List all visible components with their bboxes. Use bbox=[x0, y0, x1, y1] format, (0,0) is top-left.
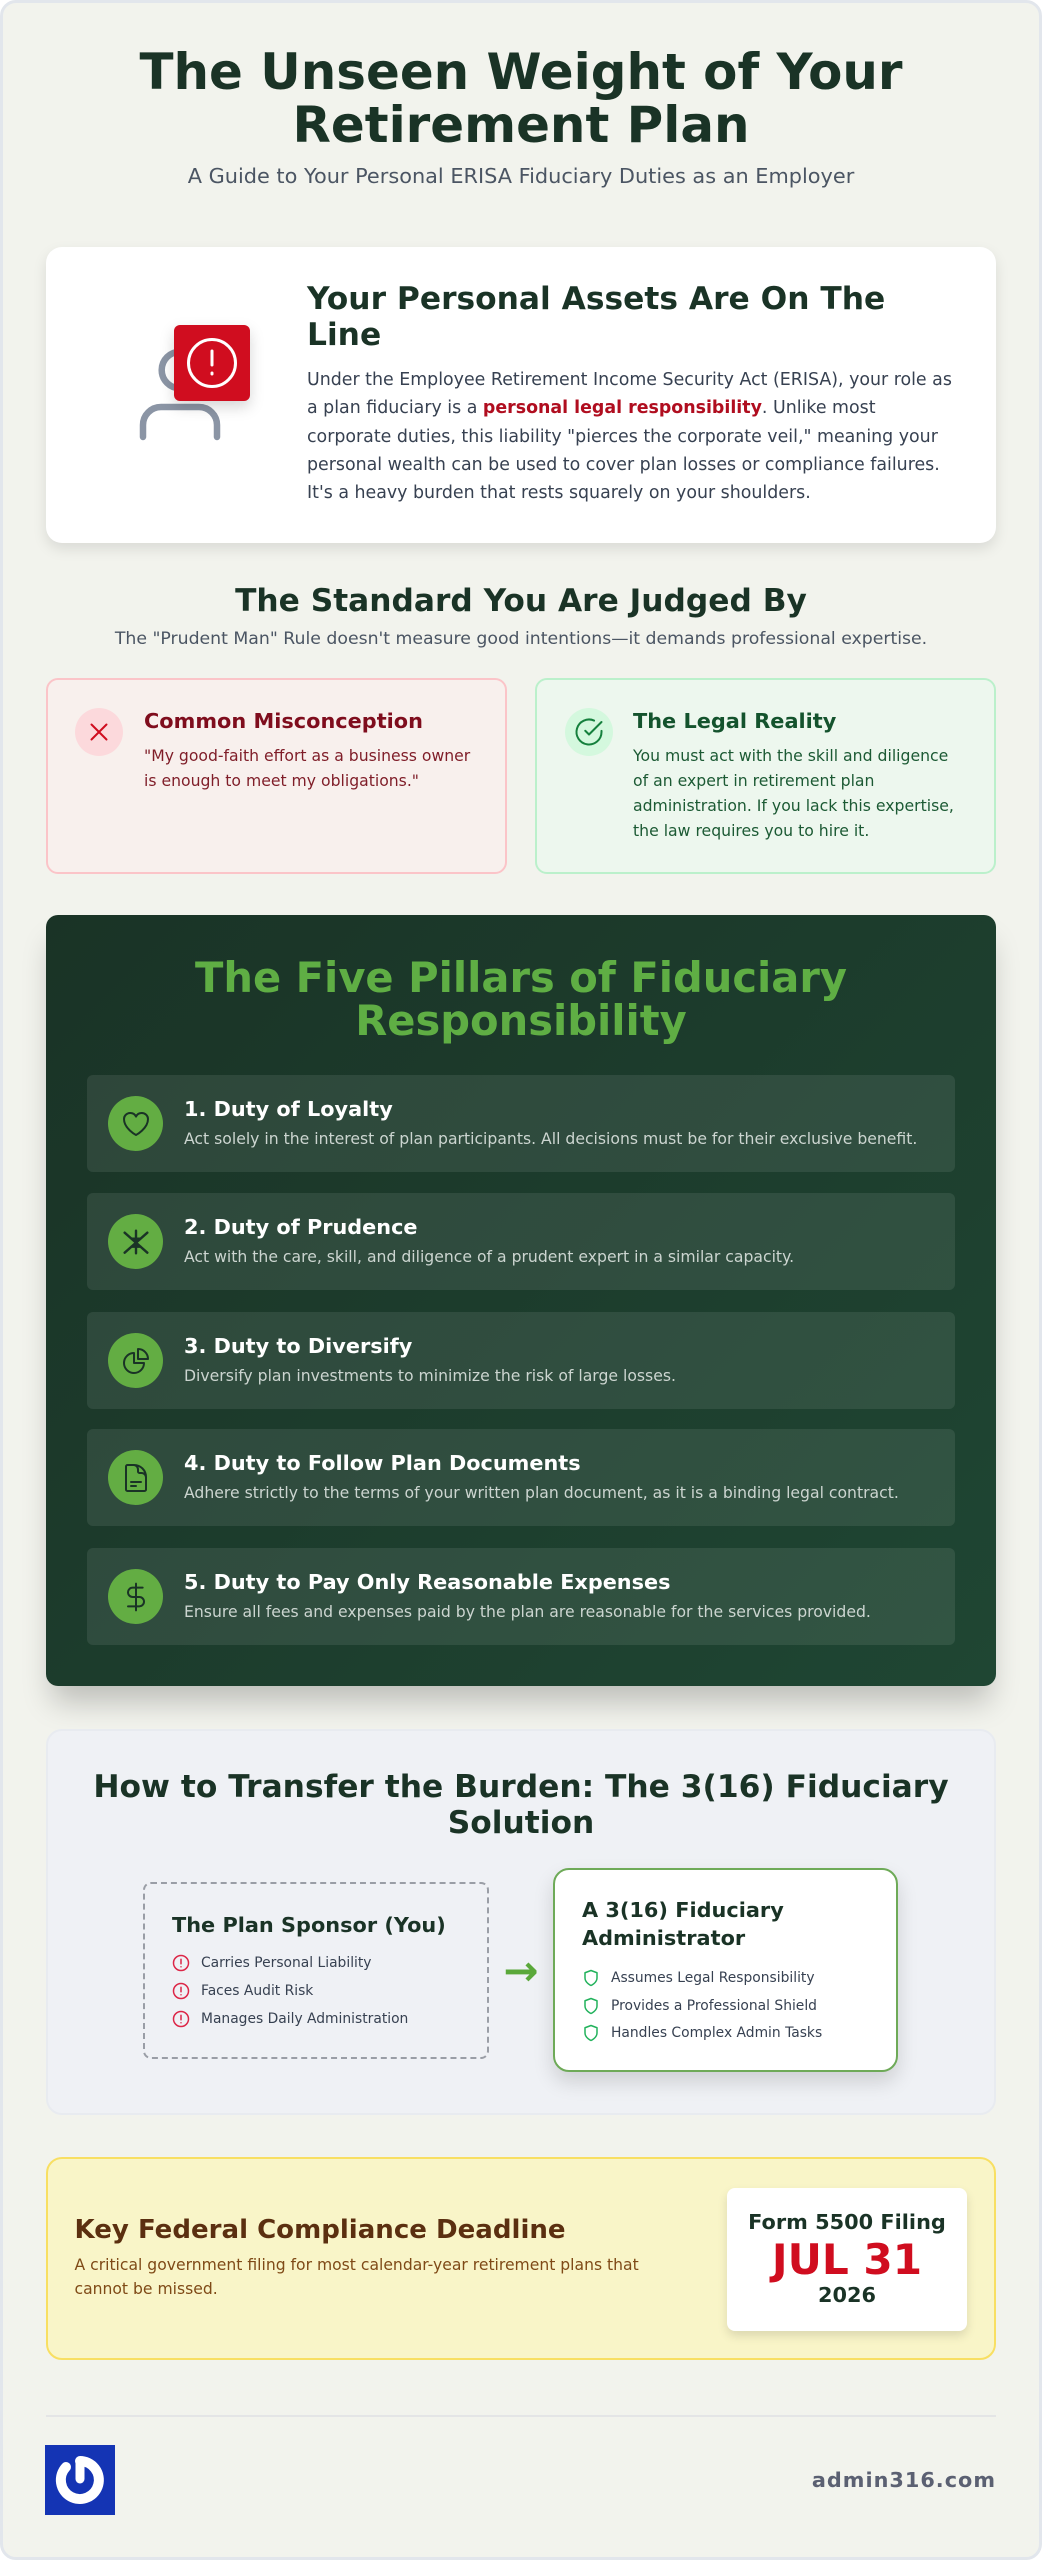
heading: the standard: The Standard You Are Judged By bbox=[235, 583, 807, 619]
text: duty to follow plan documents bbox=[184, 1451, 899, 1502]
heading: fiduciary administrator bbox=[582, 1898, 784, 1950]
text: prudent man rule: The "Prudent Man" Rule doesn't measure good intentions—it demands professional expertise. bbox=[115, 629, 927, 649]
item: audit risk: Faces Audit Risk bbox=[201, 1983, 313, 1999]
pillar 1 bbox=[87, 1075, 955, 1172]
text: legal reality bbox=[633, 746, 954, 840]
text: deadline description: cannot be missed. bbox=[74, 2280, 218, 2298]
pillar 4 bbox=[87, 1429, 955, 1526]
text: ERISA explanation: It's a heavy burden that rests squarely on your shoulders. bbox=[307, 483, 811, 503]
text: legal reality: administration. If you lack this expertise, bbox=[633, 796, 954, 815]
icon: scale asterisk bbox=[108, 1214, 163, 1269]
text: ERISA explanation: a plan fiduciary is a personal legal responsibility. Unlike most bbox=[307, 398, 876, 418]
panel: 3(16) solution bbox=[46, 1729, 996, 2115]
panel: five pillars bbox=[38, 915, 1004, 1716]
card: plan sponsor bbox=[143, 1882, 489, 2059]
text: ERISA explanation: personal wealth can be used to cover plan losses or compliance failures. bbox=[307, 455, 940, 475]
heading: fiduciary administrator: Administrator bbox=[582, 1926, 745, 1950]
text: duty to diversify: Diversify plan investments to minimize the risk of large losses. bbox=[184, 1366, 676, 1385]
heading: five pillars: The Five Pillars of Fiduciary bbox=[195, 953, 847, 1002]
text: duty to pay reasonable expenses: 5. Duty to Pay Only Reasonable Expenses bbox=[184, 1570, 670, 1594]
heading: transfer the burden: How to Transfer the Burden: The 3(16) Fiduciary bbox=[93, 1769, 949, 1805]
text: deadline description: A critical government filing for most calendar-year retirement plans that bbox=[74, 2256, 639, 2274]
heading: personal assets bbox=[306, 281, 885, 353]
text: duty of loyalty bbox=[184, 1097, 917, 1148]
item: shield: Provides a Professional Shield bbox=[611, 1998, 817, 2014]
panel: compliance deadline bbox=[46, 2157, 996, 2360]
icon: green check bbox=[565, 708, 613, 756]
panel: legal reality bbox=[535, 678, 996, 874]
text: ERISA explanation: corporate duties, this liability "pierces the corporate veil," meaning your bbox=[307, 427, 938, 447]
quote: "My good-faith effort as a business owner bbox=[144, 746, 470, 764]
arrow: → bbox=[503, 1946, 539, 1995]
text: duty to diversify bbox=[184, 1334, 676, 1385]
list: fiduciary benefits bbox=[584, 1970, 822, 2042]
text: duty to pay reasonable expenses bbox=[184, 1570, 871, 1621]
heading: fiduciary administrator: A 3(16) Fiduciary bbox=[582, 1898, 784, 1922]
heading: common misconception: Common Misconception bbox=[144, 709, 423, 733]
text: duty of prudence: 2. Duty of Prudence bbox=[184, 1215, 418, 1239]
heading: five pillars: Responsibility bbox=[355, 996, 687, 1044]
heading: five pillars bbox=[195, 953, 847, 1044]
text: year: 2026 bbox=[818, 2283, 876, 2307]
card: fiduciary administrator bbox=[546, 1868, 905, 2089]
text: duty of loyalty: Act solely in the interest of plan participants. All decisions must be for their exclusive benefit. bbox=[184, 1129, 917, 1148]
title: The Unseen Weight of Your bbox=[140, 43, 902, 101]
heading: personal assets: Line bbox=[307, 317, 381, 353]
text: legal reality: of an expert in retirement plan bbox=[633, 771, 874, 790]
heading: legal reality: The Legal Reality bbox=[633, 709, 836, 733]
pillar 2 bbox=[87, 1193, 955, 1290]
text: date: JUL 31 bbox=[772, 2235, 922, 2284]
quote: is enough to meet my obligations." bbox=[144, 771, 419, 790]
panel: personal assets bbox=[43, 247, 999, 552]
heading: deadline: Key Federal Compliance Deadline bbox=[74, 2215, 566, 2245]
heading: personal assets: Your Personal Assets Are On The bbox=[307, 281, 885, 317]
card: date bbox=[724, 2188, 970, 2339]
text: duty to follow plan documents: 4. Duty to Follow Plan Documents bbox=[184, 1451, 581, 1475]
quote bbox=[144, 746, 470, 790]
text: ERISA explanation bbox=[307, 370, 952, 503]
heading: transfer the burden: Solution bbox=[448, 1805, 594, 1841]
text: duty of loyalty: 1. Duty of Loyalty bbox=[184, 1097, 393, 1121]
text: deadline description bbox=[74, 2256, 639, 2298]
item: administration: Manages Daily Administration bbox=[201, 2010, 408, 2026]
text: form 5500: Form 5500 Filing bbox=[748, 2210, 946, 2234]
text: duty to follow plan documents: Adhere strictly to the terms of your written plan document, as it is a binding legal contract. bbox=[184, 1483, 899, 1502]
icon: document bbox=[108, 1450, 163, 1505]
icon: heart bbox=[108, 1096, 163, 1151]
icon: pie chart bbox=[108, 1333, 163, 1388]
item: admin tasks: Handles Complex Admin Tasks bbox=[611, 2025, 822, 2041]
list: sponsor burdens bbox=[172, 1954, 408, 2028]
text: legal reality: the law requires you to hire it. bbox=[633, 821, 869, 840]
pillar 5 bbox=[87, 1548, 955, 1645]
text: duty of prudence: Act with the care, skill, and diligence of a prudent expert in a similar capacity. bbox=[184, 1247, 794, 1266]
text: ERISA explanation: Under the Employee Retirement Income Security Act (ERISA), your role as bbox=[307, 370, 952, 390]
icon: red x bbox=[75, 708, 123, 756]
item: liability: Carries Personal Liability bbox=[201, 1955, 372, 1971]
icon: dollar bbox=[108, 1569, 163, 1624]
heading: plan sponsor: The Plan Sponsor (You) bbox=[172, 1913, 446, 1937]
text: duty of prudence bbox=[184, 1215, 794, 1266]
text: legal reality: You must act with the skill and diligence bbox=[633, 746, 948, 764]
pillar 3 bbox=[87, 1312, 955, 1409]
website: admin316.com bbox=[812, 2468, 996, 2492]
title: Retirement Plan bbox=[292, 96, 750, 154]
title bbox=[140, 43, 902, 154]
item: responsibility: Assumes Legal Responsibility bbox=[611, 1970, 815, 1986]
icon: person with red alert bbox=[140, 325, 256, 440]
logo bbox=[45, 2445, 115, 2515]
subtitle: A Guide to Your Personal ERISA Fiduciary Duties as an Employer bbox=[188, 164, 854, 188]
text: duty to pay reasonable expenses: Ensure all fees and expenses paid by the plan are reasonable for the services provided. bbox=[184, 1602, 871, 1621]
heading: transfer the burden bbox=[93, 1769, 949, 1841]
panel: common misconception bbox=[46, 678, 507, 874]
text: duty to diversify: 3. Duty to Diversify bbox=[184, 1334, 412, 1358]
